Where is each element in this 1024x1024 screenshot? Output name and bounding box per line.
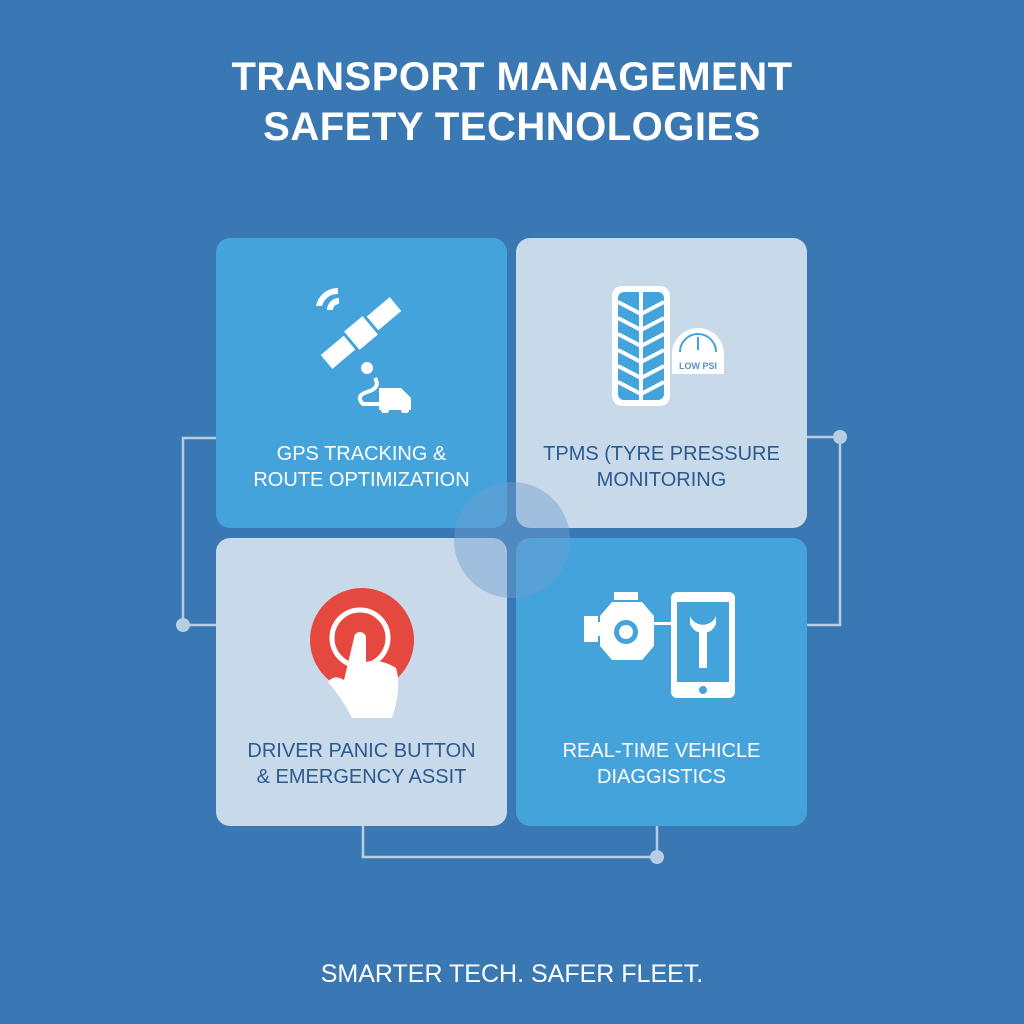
icon: tyre with gauge bbox=[612, 286, 724, 406]
text: TPMS label bbox=[543, 443, 780, 491]
icon: engine and phone bbox=[584, 592, 735, 698]
text: panic label bbox=[247, 740, 476, 788]
icon: panic button bbox=[310, 588, 414, 718]
panel: TPMS bbox=[516, 238, 807, 528]
text: diagnostics label: DIAGGISTICS bbox=[597, 766, 726, 788]
text: TPMS label: TPMS (TYRE PRESSURE bbox=[543, 443, 780, 465]
text: GPS label bbox=[253, 443, 470, 491]
text: GPS label: GPS TRACKING & bbox=[277, 443, 446, 465]
center circle bbox=[454, 482, 570, 598]
text: GPS label: ROUTE OPTIMIZATION bbox=[253, 469, 470, 491]
text: TPMS label: MONITORING bbox=[597, 469, 726, 491]
icon: tyre with gauge: LOW PSI bbox=[679, 361, 717, 371]
panel: diagnostics bbox=[516, 538, 807, 826]
icon: satellite and truck bbox=[316, 288, 411, 413]
panel: panic button bbox=[216, 538, 507, 826]
title: SAFETY TECHNOLOGIES bbox=[263, 105, 761, 149]
text: diagnostics label: REAL-TIME VEHICLE bbox=[563, 740, 760, 762]
title bbox=[231, 55, 793, 149]
panel: GPS bbox=[216, 238, 507, 528]
title: TRANSPORT MANAGEMENT bbox=[231, 55, 793, 99]
text: diagnostics label bbox=[563, 740, 760, 788]
text: panic label: & EMERGENCY ASSIT bbox=[257, 766, 466, 788]
footer tagline: SMARTER TECH. SAFER FLEET. bbox=[321, 960, 703, 988]
text: panic label: DRIVER PANIC BUTTON bbox=[247, 740, 476, 762]
